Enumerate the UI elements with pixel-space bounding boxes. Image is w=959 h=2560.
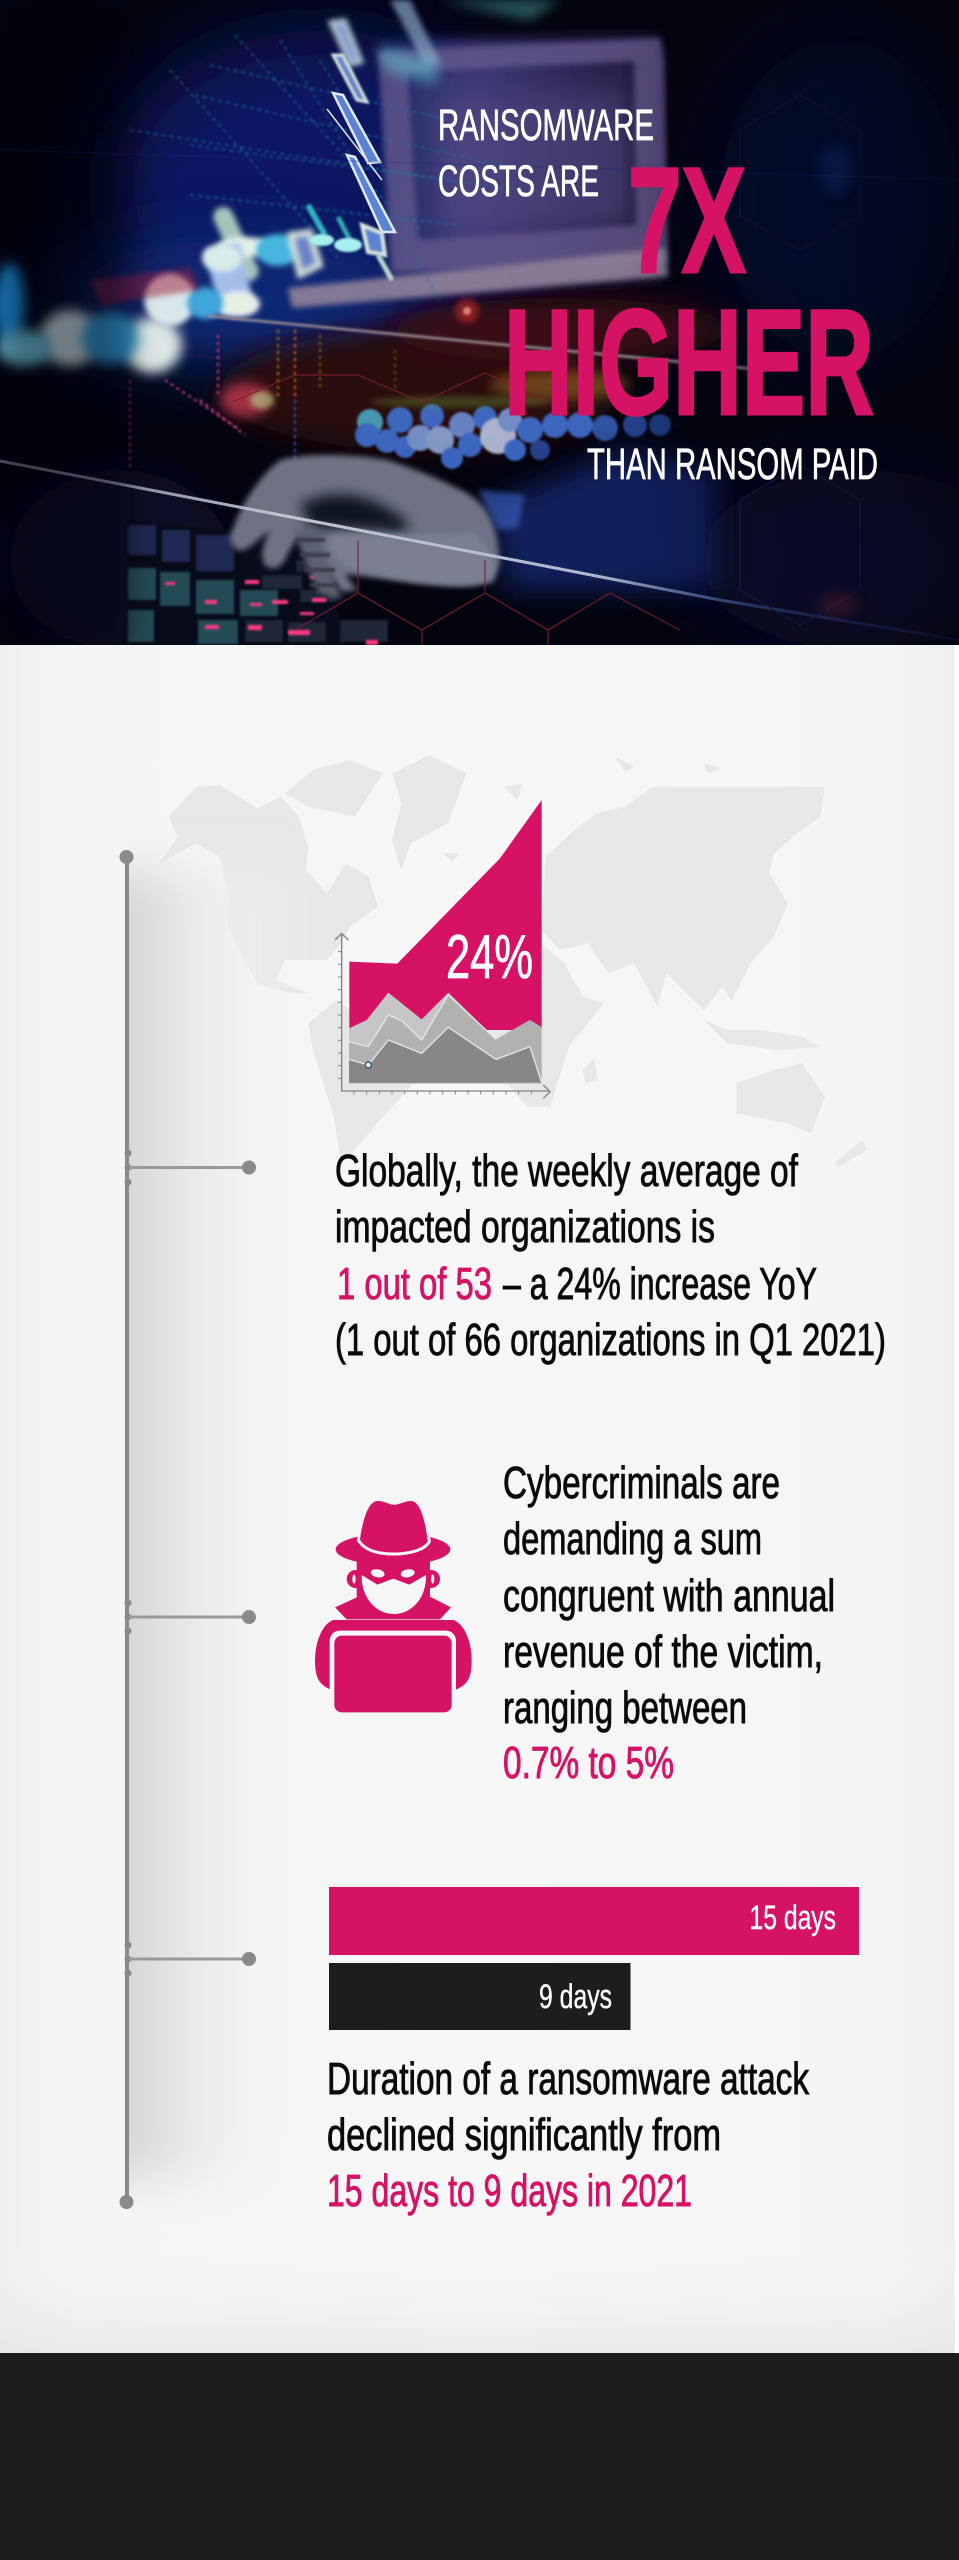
- text block: global average: Globally, the weekly average of: [335, 1145, 798, 1196]
- laptop screen: [288, 35, 668, 308]
- text block: global average: [335, 1145, 886, 1365]
- text block: attack duration: declined significantly from: [327, 2109, 721, 2160]
- bar: 9 days: [329, 1963, 630, 2030]
- hero line: ransomware: RANSOMWARE: [438, 101, 654, 150]
- text block: cybercriminals: congruent with annual: [503, 1570, 835, 1621]
- candlestick chart: [308, 0, 560, 280]
- hero panel: [0, 0, 959, 650]
- text block: attack duration: 15 days to 9 days in 2021: [327, 2165, 692, 2216]
- branch 2: [124, 1600, 256, 1634]
- footer band: [0, 2353, 959, 2560]
- text block: attack duration: Duration of a ransomware attack: [327, 2053, 809, 2104]
- text block: cybercriminals: 0.7% to 5%: [503, 1737, 674, 1788]
- branch 3: [124, 1942, 256, 1976]
- blurred candles and bokeh: [0, 204, 479, 417]
- hand: [230, 450, 715, 600]
- bar: 15 days: 15 days: [750, 1899, 836, 1937]
- branch 1: [124, 1150, 256, 1186]
- chart label: 24%: [446, 923, 533, 992]
- world map background: [159, 755, 867, 1167]
- keyboard: [128, 520, 388, 645]
- text block: global average: impacted organizations is: [335, 1201, 715, 1252]
- timeline start dot: [120, 850, 134, 864]
- icon: hacker with laptop: [315, 1499, 472, 1718]
- hexagon overlay: [232, 95, 860, 645]
- text block: attack duration: [327, 2053, 809, 2216]
- text block: global average: – a 24% increase YoY: [503, 1258, 817, 1309]
- keyboard bokeh: [355, 404, 671, 469]
- pink growth area: [349, 800, 542, 1030]
- timeline vertical line: [125, 857, 129, 2202]
- timeline end dot: [120, 2195, 134, 2209]
- text block: cybercriminals: revenue of the victim,: [503, 1626, 823, 1677]
- text block: cybercriminals: ranging between: [503, 1682, 747, 1733]
- text block: global average: 1 out of 53: [337, 1258, 492, 1309]
- thin diagonal light lines: [0, 150, 959, 640]
- text block: cybercriminals: [503, 1457, 835, 1788]
- timeline: [120, 850, 309, 2209]
- text block: cybercriminals: demanding a sum: [503, 1513, 762, 1564]
- content panel background: [0, 645, 959, 2353]
- bar chart: attack duration: [329, 1887, 859, 2030]
- data rain streaks: [128, 328, 397, 468]
- area chart: 24%: [335, 800, 550, 1098]
- hero line: costs are: COSTS ARE: [438, 157, 599, 206]
- text block: cybercriminals: Cybercriminals are: [503, 1457, 780, 1508]
- bar: 15 days: [329, 1887, 859, 1955]
- hero number: 7X: 7X: [628, 136, 746, 304]
- bar: 9 days: 9 days: [539, 1978, 612, 2016]
- dashed chart grid: [130, 35, 520, 300]
